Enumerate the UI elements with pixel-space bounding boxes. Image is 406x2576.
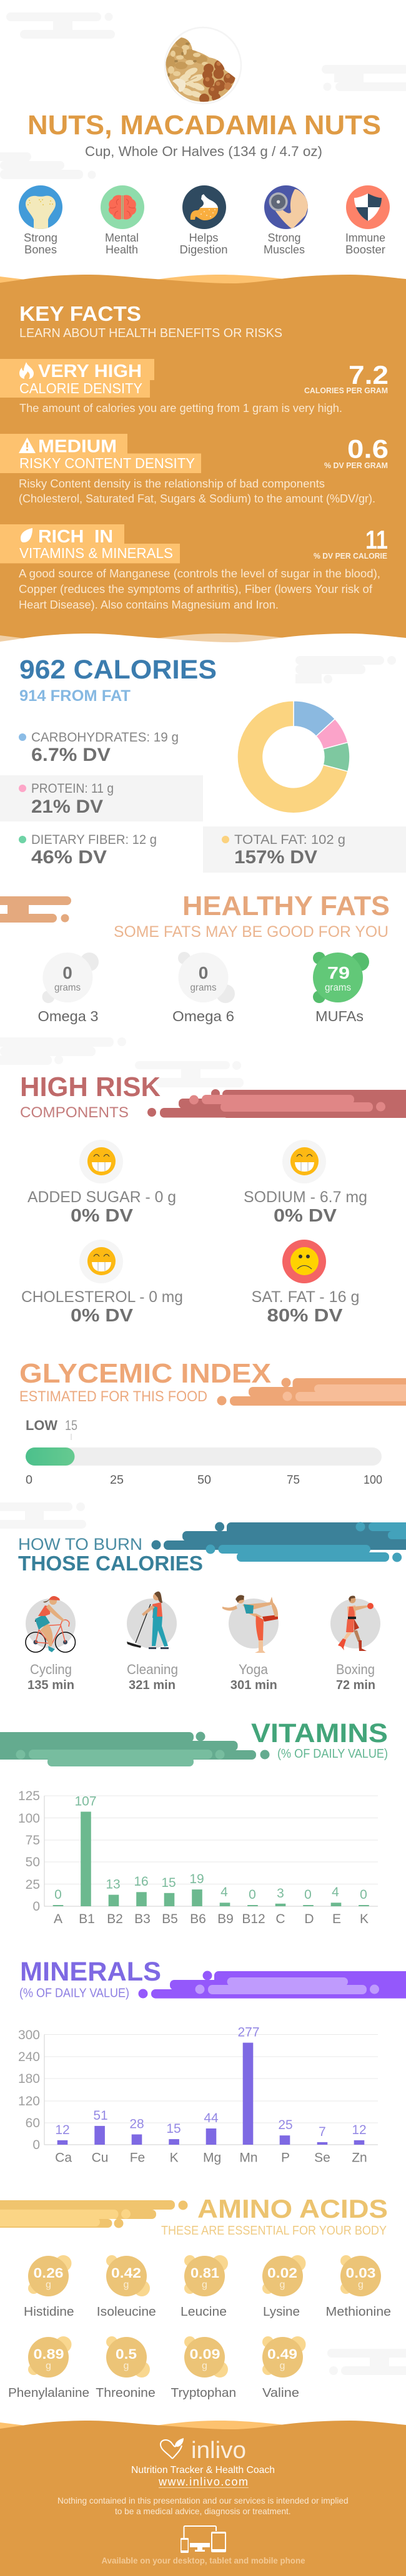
activity: cleaning: Cleaning [127, 1662, 178, 1677]
icon: strong muscles [264, 185, 309, 229]
amino: tryptophan [171, 2336, 236, 2400]
heading: HEALTHY FATS [182, 891, 390, 921]
amino: lysine: g [280, 2280, 285, 2290]
item: protein [0, 775, 203, 821]
stat: mufas: 79 [327, 963, 350, 982]
bar chart: vitamins: 100 [18, 1811, 40, 1826]
bar chart: vitamins: 75 [26, 1833, 40, 1848]
label: strong muscles [264, 232, 305, 256]
bar chart: minerals: 0 [32, 2138, 40, 2152]
icon: grinning face [87, 1247, 116, 1275]
item: cholesterol [21, 1240, 183, 1326]
stat: mufas: grams [325, 982, 351, 993]
activity: boxing: Boxing [336, 1662, 375, 1677]
amino: phenylalanine: 0.89 [34, 2346, 64, 2362]
amino: leucine: 0.81 [191, 2265, 219, 2281]
stat: omega 6: grams [190, 982, 216, 993]
website link: www.inlivo.com [158, 2476, 248, 2488]
amino: valine [262, 2336, 306, 2400]
bar chart: minerals: P [281, 2151, 290, 2165]
background cloud: right [322, 65, 406, 91]
amino: lysine [262, 2255, 306, 2319]
tagline: Nutrition Tracker & Health Coach [131, 2465, 275, 2476]
bar chart: minerals [18, 2025, 378, 2165]
subheading: (% OF DAILY VALUE) [277, 1747, 388, 1761]
amino: phenylalanine: g [46, 2361, 51, 2371]
header section [0, 12, 406, 256]
subheading: 914 FROM FAT [19, 687, 131, 705]
icon: dancer pose [222, 1595, 278, 1653]
label: immune booster [345, 232, 385, 256]
amino: phenylalanine: Phenylalanine [8, 2386, 89, 2400]
gauge scale: 100 [364, 1474, 382, 1487]
item: dietary fiber: 46% DV [31, 847, 107, 868]
bar chart: vitamins: B3 [134, 1912, 151, 1926]
bar chart: vitamins: 15 [161, 1876, 176, 1890]
subheading: THESE ARE ESSENTIAL FOR YOUR BODY [161, 2224, 387, 2238]
heading: KEY FACTS [19, 302, 141, 325]
decorative bars [139, 1971, 406, 1999]
bar chart: vitamins: 3 [277, 1886, 284, 1901]
bar chart: vitamins: B1 [79, 1912, 95, 1926]
amino: methionine: 0.03 [346, 2265, 376, 2281]
bar chart: vitamins: E [332, 1912, 341, 1926]
decorative bars [0, 2200, 187, 2228]
bar chart: vitamins: D [304, 1912, 314, 1926]
amino: isoleucine [97, 2255, 156, 2319]
stat: omega 3 [37, 953, 99, 1024]
stat: mufas [313, 952, 369, 1024]
label: immune booster: Immune [345, 232, 385, 244]
amino: valine: Valine [262, 2386, 299, 2400]
item: carbohydrates [19, 730, 179, 765]
bar chart: minerals: Ca [55, 2151, 72, 2165]
amino: valine: 0.49 [267, 2346, 297, 2362]
gauge value: LOW [26, 1418, 57, 1433]
amino: lysine: Lysine [263, 2305, 300, 2319]
gauge value [26, 1418, 77, 1440]
panel: calories [0, 655, 406, 873]
amino: methionine [326, 2255, 391, 2319]
bar chart: minerals: Cu [92, 2151, 108, 2165]
disclaimer: Nothing contained in this presentation and our services is intended or implied [57, 2495, 349, 2505]
amino: phenylalanine [8, 2336, 89, 2400]
bar chart: vitamins: 0 [304, 1888, 312, 1902]
fact: risky content density: (Cholesterol, Saturated Fat, Sugars & Sodium) to the amount (%DV/gr). [19, 492, 375, 505]
amino: tryptophan: g [202, 2361, 207, 2371]
bar chart: minerals: Mg [203, 2151, 221, 2165]
background cloud: left middle [0, 152, 96, 179]
icon: warning triangle [19, 438, 36, 453]
label: strong bones [24, 232, 57, 256]
bottom wave [0, 634, 406, 649]
item: total fat: TOTAL FAT: 102 g [234, 833, 345, 847]
label: helps digestion: Helps [189, 232, 219, 244]
decorative bars [151, 1522, 406, 1562]
label: mental health: Health [106, 243, 138, 256]
label: mental health [105, 232, 139, 256]
bar chart: minerals: K [170, 2151, 179, 2165]
subheading: SOME FATS MAY BE GOOD FOR YOU [114, 923, 389, 941]
bar chart: minerals: 15 [166, 2122, 181, 2136]
item: sodium [244, 1140, 367, 1226]
gauge scale: 75 [287, 1474, 300, 1487]
bar chart: minerals: 240 [18, 2050, 40, 2064]
gauge scale: 0 [26, 1474, 32, 1487]
panel: vitamins [0, 1718, 388, 1926]
fact: risky content density: 0.6 [347, 434, 389, 464]
logo: heart with leaf [161, 2438, 184, 2459]
icon: person sweeping [127, 1592, 169, 1649]
bar chart: vitamins: 0 [32, 1899, 40, 1914]
icon: immune booster [346, 185, 390, 229]
item: saturated fat: 80% DV [267, 1306, 343, 1326]
amino: threonine: 0.5 [116, 2346, 137, 2362]
heading: VITAMINS [251, 1718, 388, 1748]
panel: glycemic index [19, 1358, 406, 1487]
amino: valine: g [280, 2361, 285, 2371]
item: protein: PROTEIN: 11 g [31, 781, 114, 796]
item: cholesterol: 0% DV [71, 1306, 134, 1326]
activity: boxing [330, 1596, 380, 1692]
footer [0, 2421, 406, 2576]
icon: strong bones [19, 185, 62, 229]
item: carbohydrates: CARBOHYDRATES: 19 g [31, 730, 179, 745]
amino: isoleucine: 0.42 [111, 2265, 141, 2281]
bar chart: minerals: Mn [239, 2151, 258, 2165]
label: helps digestion [180, 232, 227, 256]
fact: risky content density [0, 434, 389, 505]
bar chart: vitamins: 125 [18, 1789, 40, 1803]
decorative bars [0, 896, 71, 923]
item: saturated fat [251, 1240, 360, 1326]
subheading: ESTIMATED FOR THIS FOOD [19, 1388, 207, 1405]
background clouds [0, 1037, 244, 1087]
icon: leaf [21, 528, 32, 542]
logo wordmark: inlivo [191, 2437, 246, 2464]
bar chart: minerals: Fe [130, 2151, 145, 2165]
fact: rich in vitamins and minerals: % DV PER CALORIE [314, 551, 387, 561]
item: sodium: SODIUM - 6.7 mg [244, 1188, 367, 1206]
availability note: Available on your desktop, tablet and mobile phone [101, 2555, 305, 2565]
decorative bars [0, 1731, 270, 1766]
label: immune booster: Booster [345, 243, 385, 256]
fact: rich in vitamins and minerals [0, 524, 388, 611]
panel: key facts [0, 275, 406, 649]
activity: cycling [26, 1596, 76, 1692]
bar chart: vitamins: 25 [26, 1878, 40, 1892]
decorative bars [147, 1089, 406, 1118]
bar chart: vitamins: 0 [54, 1888, 62, 1902]
icon: helps digestion [182, 185, 226, 229]
amino: threonine: Threonine [96, 2386, 156, 2400]
item: sodium: 0% DV [274, 1206, 337, 1226]
fact: rich in vitamins and minerals: A good source of Manganese (controls the level of sugar in the blood), [19, 567, 380, 580]
bar chart: minerals: 28 [129, 2117, 144, 2131]
donut chart [237, 701, 350, 813]
amino: histidine: Histidine [24, 2305, 74, 2319]
heading: GLYCEMIC INDEX [19, 1358, 271, 1389]
activity: yoga [222, 1595, 279, 1692]
fact: rich in vitamins and minerals: Heart Disease). Also contains Magnesium and Iron. [19, 599, 279, 611]
bar chart: minerals: 277 [237, 2025, 260, 2040]
activity: yoga: Yoga [239, 1662, 269, 1677]
stat: omega 6: 0 [199, 963, 208, 982]
activity: yoga: 301 min [230, 1678, 277, 1692]
bar chart: vitamins: B9 [217, 1912, 234, 1926]
stat: omega 6: Omega 6 [172, 1008, 234, 1024]
bar chart: minerals: 51 [93, 2108, 108, 2123]
item: total fat [203, 826, 406, 873]
title: NUTS, MACADAMIA NUTS [27, 110, 381, 140]
amino: histidine [24, 2255, 74, 2319]
decorative bars [217, 1378, 406, 1406]
icon: cyclist [26, 1596, 75, 1652]
disclaimer [57, 2495, 349, 2516]
amino: threonine [96, 2336, 156, 2400]
heading: light line: HOW TO BURN [18, 1535, 142, 1554]
heading: bold line: THOSE CALORIES [18, 1552, 203, 1575]
bar chart: vitamins: 107 [74, 1794, 97, 1809]
bar chart: minerals: 7 [319, 2125, 326, 2139]
panel: amino acids [0, 2194, 406, 2400]
activity: cleaning: 321 min [129, 1678, 176, 1692]
stat: mufas: MUFAs [315, 1008, 364, 1024]
label: strong bones: Bones [24, 243, 57, 256]
icon: boxer [338, 1596, 374, 1651]
amino: tryptophan: Tryptophan [171, 2386, 236, 2400]
fact: risky content density: RISKY CONTENT DENSITY [19, 455, 195, 471]
orange band with top wave [0, 275, 406, 643]
label: strong muscles: Strong [267, 232, 301, 244]
fact: calorie density: 7.2 [349, 360, 389, 389]
amino: isoleucine: Isoleucine [97, 2305, 156, 2319]
bar chart: minerals: Zn [352, 2151, 367, 2165]
panel: how to burn those calories [0, 1502, 406, 1692]
bar chart: minerals: Se [314, 2151, 330, 2165]
background cloud [0, 1502, 86, 1529]
bar chart: vitamins: B2 [107, 1912, 123, 1926]
label: mental health: Mental [105, 232, 139, 244]
fact: rich in vitamins and minerals: 11 [365, 525, 388, 554]
label: strong bones: Strong [24, 232, 57, 244]
activity: cycling: Cycling [30, 1662, 72, 1677]
fact: calorie density: VERY HIGH [38, 361, 142, 381]
footer wave background [0, 2421, 406, 2576]
activity: cleaning [127, 1592, 178, 1692]
gauge scale: 50 [197, 1474, 211, 1487]
fact: risky content density: MEDIUM [38, 437, 117, 457]
bar chart: vitamins: C [275, 1912, 285, 1926]
bar chart: vitamins: 0 [249, 1888, 256, 1902]
fact: rich in vitamins and minerals: Copper (reduces the symptoms of arthritis), Fiber (lowers Your risk of [19, 583, 373, 595]
bar chart: vitamins: B12 [242, 1912, 265, 1926]
heading: HIGH RISK [20, 1072, 161, 1102]
amino: lysine: 0.02 [267, 2265, 297, 2281]
amino: leucine: Leucine [181, 2305, 227, 2319]
fact: calorie density: CALORIES PER GRAM [304, 386, 388, 395]
icon: mental health [101, 185, 144, 229]
background cloud [327, 2349, 406, 2375]
gauge bar [26, 1447, 382, 1466]
fact: rich in vitamins and minerals: RICH IN [38, 527, 113, 547]
label: strong muscles: Muscles [264, 243, 305, 256]
subheading: COMPONENTS [20, 1104, 129, 1121]
fact: risky content density: % DV PER GRAM [324, 461, 388, 470]
amino: histidine: g [46, 2280, 51, 2290]
gauge scale: 25 [110, 1474, 124, 1487]
disclaimer: to be a medical advice, diagnosis or treatment. [115, 2506, 291, 2516]
background cloud [295, 656, 396, 683]
icon: flame [19, 362, 34, 379]
bar chart: minerals: 12 [352, 2123, 367, 2137]
icon: sad face [290, 1247, 319, 1275]
panel: healthy fats [0, 891, 390, 1024]
amino: tryptophan: 0.09 [190, 2346, 220, 2362]
heading: AMINO ACIDS [197, 2194, 388, 2223]
bar chart: vitamins: 0 [360, 1888, 367, 1902]
stat: omega 6 [172, 952, 235, 1024]
amino: leucine: g [202, 2280, 207, 2290]
bar chart: vitamins: 4 [220, 1885, 228, 1899]
subheading: (% OF DAILY VALUE) [19, 1987, 129, 2001]
item: added sugar [27, 1140, 176, 1226]
item: dietary fiber [19, 833, 157, 868]
heading: 962 CALORIES [19, 655, 217, 685]
amino: threonine: g [124, 2361, 129, 2371]
activity: cycling: 135 min [27, 1678, 74, 1692]
icon: grinning face [290, 1147, 319, 1175]
bar chart: minerals: 120 [18, 2094, 40, 2108]
panel: minerals [18, 1957, 406, 2165]
stat: omega 3: grams [54, 982, 81, 993]
bar chart: minerals: 44 [204, 2111, 219, 2125]
bar chart: vitamins: B6 [190, 1912, 206, 1926]
icon: devices [181, 2525, 226, 2553]
bar chart: vitamins: B5 [162, 1912, 178, 1926]
stat: omega 3: 0 [62, 963, 72, 982]
bar chart: minerals: 12 [55, 2123, 70, 2137]
icon: grinning face [87, 1147, 116, 1175]
amino: histidine: 0.26 [34, 2265, 64, 2281]
gauge scale [26, 1474, 382, 1487]
bar chart: vitamins: 19 [189, 1872, 204, 1886]
amino: leucine [181, 2255, 228, 2319]
item: added sugar: 0% DV [71, 1206, 134, 1226]
fact: calorie density [0, 359, 389, 414]
bar chart: vitamins: 13 [106, 1878, 121, 1892]
bar chart: vitamins [18, 1789, 378, 1926]
fact: calorie density: The amount of calories you are getting from 1 gram is very high. [19, 402, 342, 414]
item: dietary fiber: DIETARY FIBER: 12 g [31, 833, 157, 847]
item: protein: 21% DV [31, 796, 103, 817]
item: carbohydrates: 6.7% DV [31, 745, 111, 765]
bar chart: minerals: 60 [26, 2116, 40, 2130]
amino: methionine: g [358, 2280, 364, 2290]
bar chart: minerals: 180 [18, 2072, 40, 2086]
item: saturated fat: SAT. FAT - 16 g [251, 1288, 360, 1306]
fact: risky content density: Risky Content density is the relationship of bad components [19, 477, 325, 490]
bar chart: minerals: 300 [18, 2028, 40, 2042]
subheading: LEARN ABOUT HEALTH BENEFITS OR RISKS [19, 326, 282, 340]
bar chart: vitamins: 16 [134, 1874, 149, 1889]
item: total fat: 157% DV [234, 847, 317, 868]
bar chart: minerals: 25 [278, 2118, 293, 2132]
panel: high risk components [0, 1037, 406, 1326]
item: cholesterol: CHOLESTEROL - 0 mg [21, 1288, 183, 1306]
label: helps digestion: Digestion [180, 243, 227, 256]
subtitle: Cup, Whole Or Halves (134 g / 4.7 oz) [85, 144, 322, 159]
bar chart: vitamins: 50 [26, 1855, 40, 1869]
gauge value: 15 [65, 1418, 77, 1433]
background cloud: top left [6, 12, 115, 39]
heading: MINERALS [20, 1957, 161, 1987]
amino: methionine: Methionine [326, 2305, 391, 2319]
stat: omega 3: Omega 3 [37, 1008, 99, 1024]
nuts photo [162, 27, 241, 106]
bar chart: vitamins: 4 [332, 1885, 339, 1899]
fact: rich in vitamins and minerals: VITAMINS & MINERALS [19, 545, 173, 561]
fact: calorie density: CALORIE DENSITY [19, 380, 142, 396]
bar chart: vitamins: A [54, 1912, 62, 1926]
bar chart: vitamins: K [360, 1912, 369, 1926]
activity: boxing: 72 min [336, 1678, 375, 1692]
item: added sugar: ADDED SUGAR - 0 g [27, 1188, 176, 1206]
amino: isoleucine: g [124, 2280, 129, 2290]
